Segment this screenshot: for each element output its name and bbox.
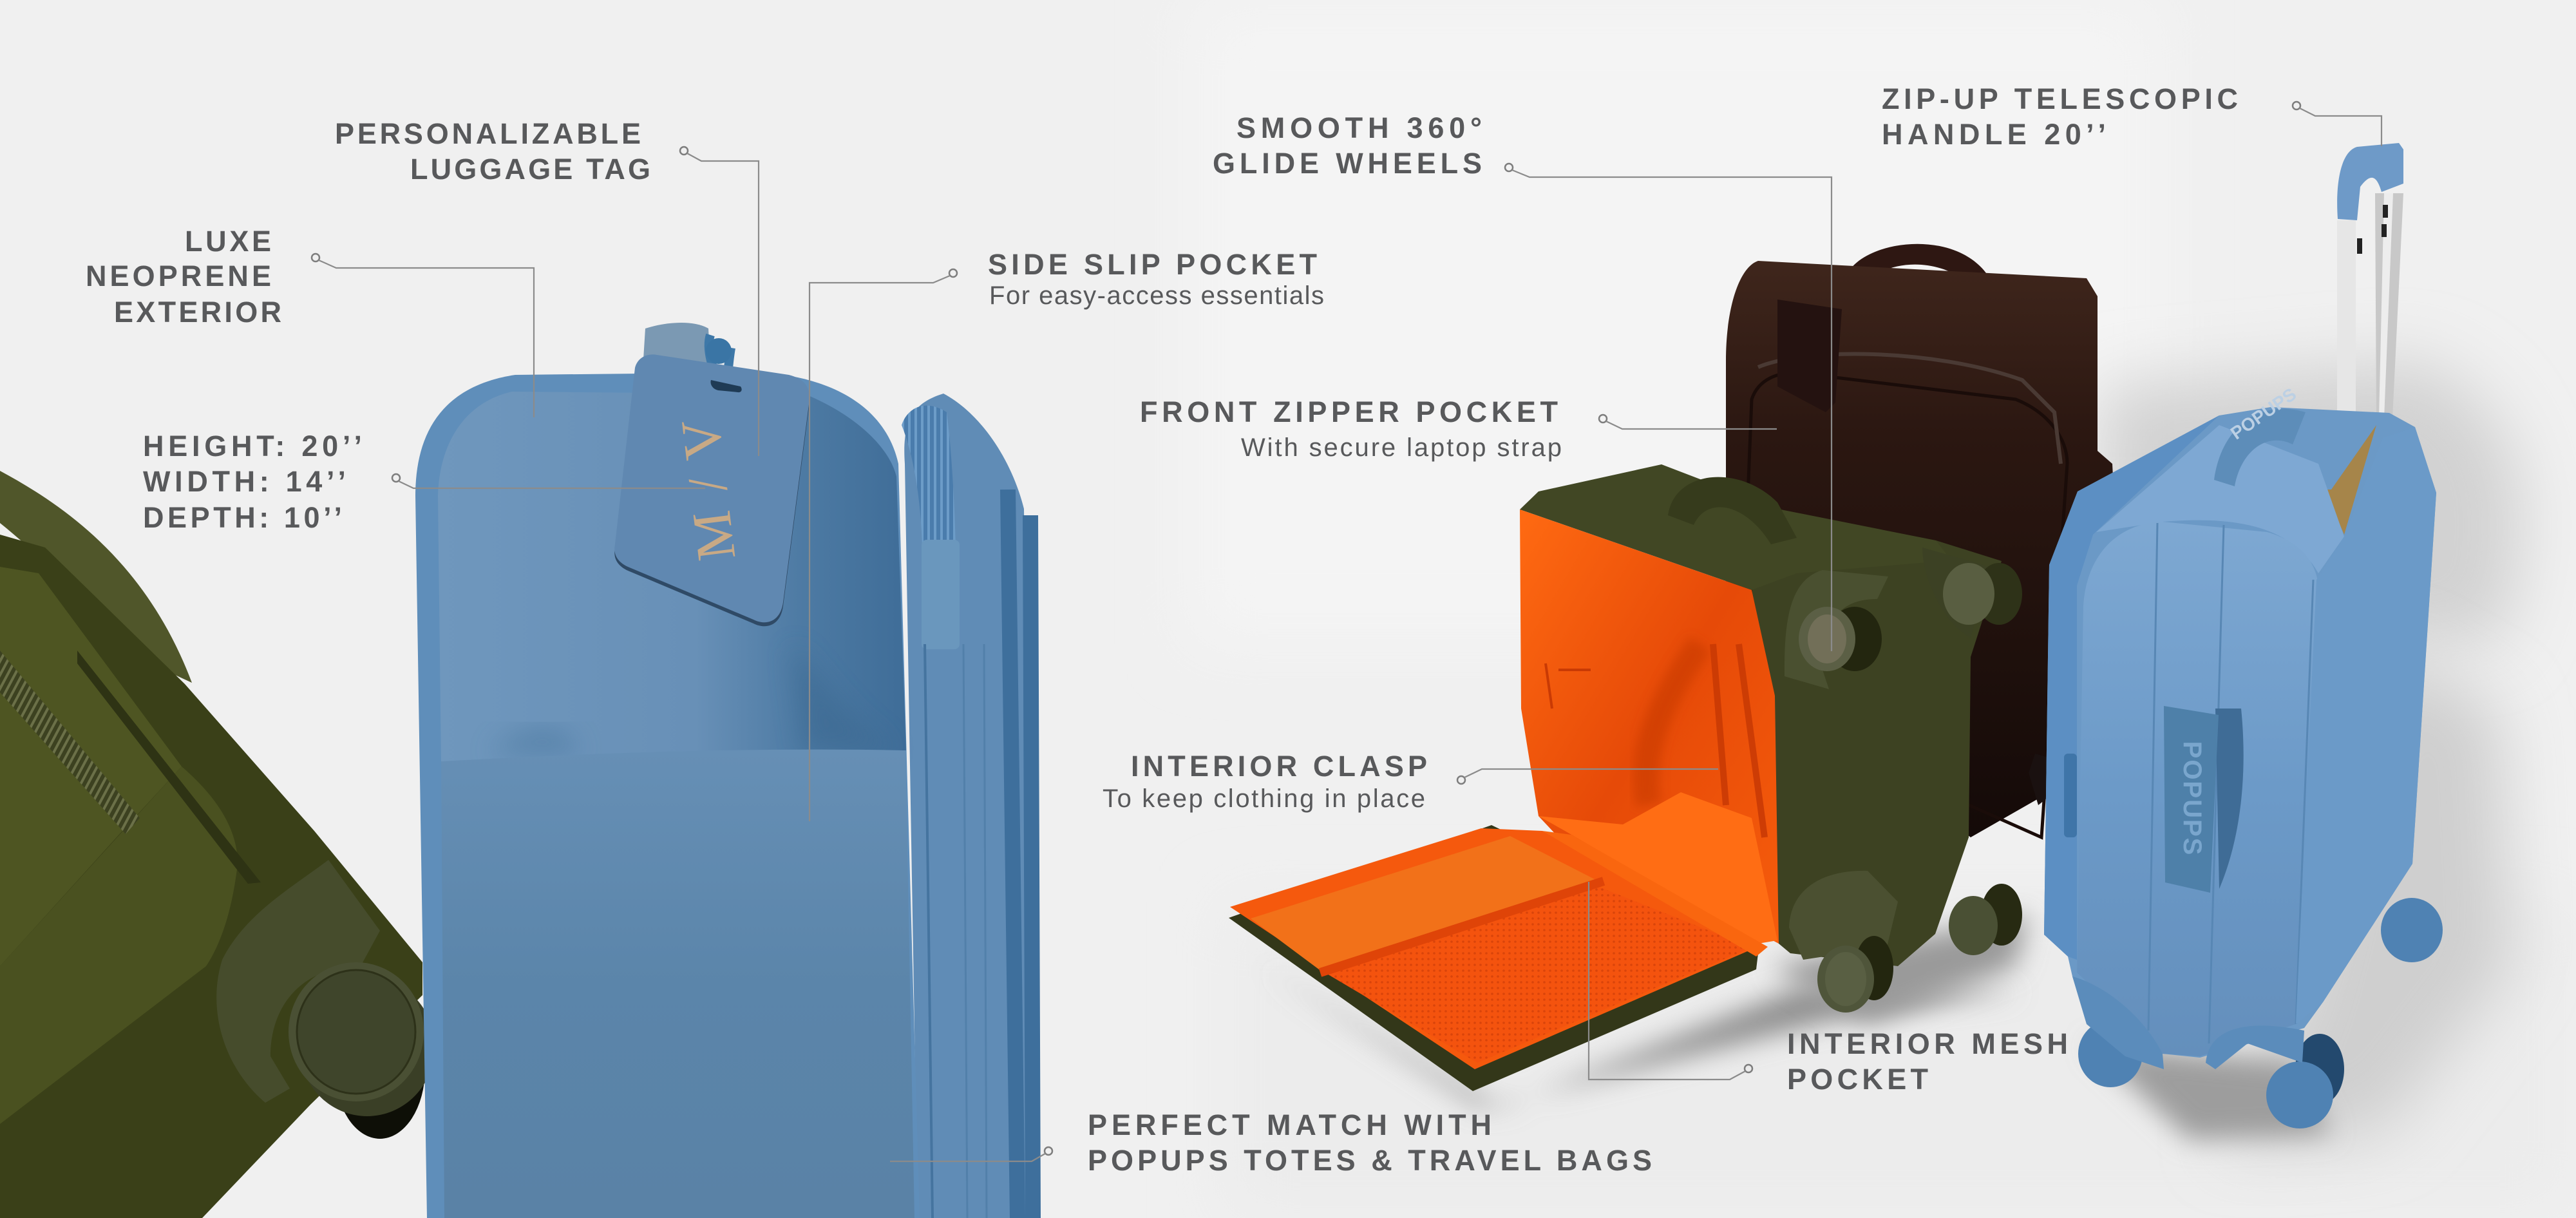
label: interior clasp: To keep clothing in place [1103, 785, 1425, 813]
brown caster [2029, 754, 2058, 805]
label: personalizable luggage tag: LUGGAGE TAG [410, 153, 650, 186]
right side panel [2296, 427, 2436, 1024]
side zipper [902, 406, 956, 547]
blue wheels [2078, 898, 2443, 1128]
label: luxe neoprene exterior: LUXE [185, 225, 271, 258]
open lid orange lining [1230, 828, 1756, 1069]
brown pocket zipper [1758, 354, 2061, 464]
hinge gusset [1542, 831, 1768, 956]
gold inner lining [2325, 425, 2376, 535]
brown handle [1846, 244, 1993, 287]
label: perfect match: POPUPS TOTES & TRAVEL BAGS [1088, 1144, 1652, 1177]
tag hole [710, 380, 742, 392]
label: side slip pocket: SIDE SLIP POCKET [988, 248, 1317, 281]
brown suitcase [1726, 244, 2114, 837]
interior folds [1546, 644, 1765, 837]
label: personalizable luggage tag [335, 117, 759, 456]
label: luxe neoprene exterior: EXTERIOR [114, 296, 281, 328]
lower wheel housing [1789, 871, 1898, 960]
top carry handle: POPUPS [2227, 384, 2300, 443]
leader line [2293, 102, 2382, 146]
label: telescopic handle: ZIP-UP TELESCOPIC [1882, 82, 2238, 115]
top handle [642, 323, 711, 380]
luggage tag [614, 354, 810, 626]
label: smooth glide wheels: SMOOTH 360° [1236, 111, 1482, 144]
label: perfect match: PERFECT MATCH WITH [1088, 1109, 1492, 1141]
embroidered initials: M / V [668, 414, 748, 564]
zipper [0, 651, 140, 834]
front zipper pull [2064, 754, 2077, 837]
label: front zipper pocket [1140, 395, 1777, 462]
side grab handle recess [2215, 709, 2244, 889]
label: dimensions: HEIGHT: 20’’ [143, 430, 362, 462]
upper panel [438, 392, 906, 763]
side wheel housing [1785, 570, 1888, 689]
side grab handle strap: POPUPS [2178, 741, 2206, 856]
brown tag [1777, 300, 1842, 412]
right blue suitcase [2044, 143, 2443, 1128]
open olive suitcase [1229, 464, 2022, 1091]
label: dimensions [143, 430, 705, 534]
label: side slip pocket: For easy-access essentials [989, 281, 1324, 310]
front panel [2077, 522, 2318, 1056]
top carry handle [2214, 384, 2306, 486]
label: interior mesh pocket: INTERIOR MESH [1787, 1027, 2068, 1060]
leader line [312, 254, 534, 417]
front slip pocket [441, 750, 914, 1218]
open lid lower edge [1229, 825, 1758, 1091]
label: front zipper pocket: With secure laptop strap [1241, 433, 1562, 462]
olive body [0, 535, 422, 1218]
leader line [810, 269, 957, 821]
olive pocket band [0, 766, 238, 1124]
upper wheel right [1922, 547, 2022, 638]
side panel [904, 394, 1033, 1218]
olive top face [1520, 464, 1951, 590]
label: telescopic handle [1882, 82, 2382, 151]
lid zipper [1320, 881, 1604, 973]
olive side face [1752, 540, 2002, 966]
orange interior [1520, 509, 1779, 944]
leader line [1457, 769, 1718, 784]
label: luxe neoprene exterior: NEOPRENE [86, 260, 271, 292]
seams [2148, 523, 2313, 1043]
leader line [680, 147, 759, 456]
olive carry handle [1668, 477, 1797, 544]
label: telescopic handle: HANDLE 20’’ [1882, 118, 2106, 151]
label: side slip pocket [810, 248, 1324, 821]
wheel housing [216, 860, 380, 1103]
label: interior clasp: INTERIOR CLASP [1131, 750, 1427, 783]
label: interior mesh pocket: POCKET [1787, 1063, 1928, 1096]
olive carry strap [0, 471, 192, 683]
wall and floor shadows [1262, 361, 2522, 1147]
blue body [2044, 407, 2436, 1058]
interior floor [1539, 792, 1777, 944]
label: perfect match [890, 1109, 1652, 1177]
telescopic handle [2337, 143, 2403, 496]
top face [2096, 425, 2344, 573]
leader line [1505, 164, 1832, 651]
side compartment [2044, 415, 2219, 960]
leader line [1589, 882, 1752, 1080]
label: smooth glide wheels: GLIDE WHEELS [1213, 147, 1482, 180]
label: interior clasp [1103, 750, 1718, 813]
lid mesh pocket [1326, 886, 1752, 1063]
leader line [392, 474, 705, 488]
label: front zipper pocket: FRONT ZIPPER POCKET [1140, 395, 1558, 428]
label: smooth glide wheels [1213, 111, 1832, 651]
olive upper front panel [0, 567, 182, 966]
label: luxe neoprene exterior [86, 225, 534, 417]
brown body [1726, 261, 2114, 837]
luggage tag cord [706, 335, 732, 390]
lower wheels rear [1949, 884, 2022, 955]
brown front pocket [1742, 373, 2067, 837]
wheel [289, 962, 435, 1139]
upper edge zipper [77, 651, 261, 884]
label: personalizable luggage tag: PERSONALIZABLE [335, 117, 641, 150]
bottom feet [2072, 976, 2304, 1069]
lid upper pocket [1251, 836, 1596, 971]
label: interior mesh pocket [1589, 882, 2068, 1096]
side zipper pull [922, 540, 960, 649]
label: dimensions: WIDTH: 14’’ [143, 465, 346, 498]
leader line [1599, 415, 1777, 429]
side grab handle strap [2164, 706, 2219, 893]
leader line [890, 1147, 1052, 1161]
left olive suitcase [0, 471, 435, 1218]
body rim [415, 372, 920, 1218]
upper panel creases [489, 644, 895, 754]
lower wheels front [1817, 936, 1893, 1013]
large blue suitcase side view [415, 323, 1033, 1218]
label: dimensions: DEPTH: 10’’ [143, 501, 342, 534]
upper wheel left [1799, 607, 1882, 671]
side stripes [925, 490, 1033, 1218]
